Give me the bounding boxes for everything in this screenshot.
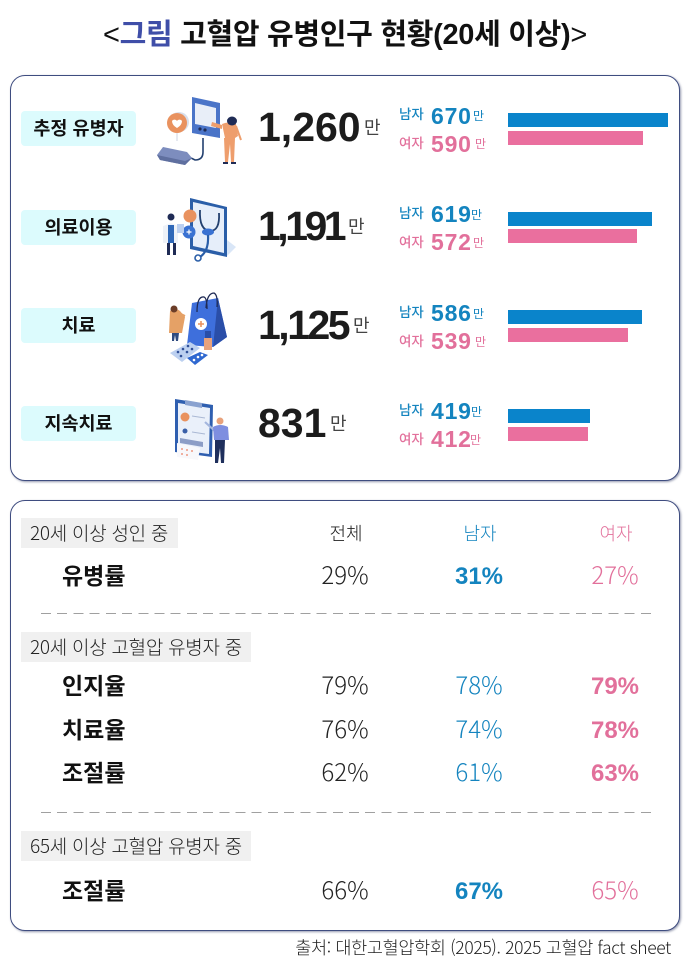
male 619: 남자 [399,206,424,221]
text: 572 [431,229,472,255]
female 590: 여자 [399,136,424,151]
row: control rate 65+: 조절률 [62,878,125,904]
panel: patient counts [10,75,680,481]
total: 1,260: 1,260 [258,104,361,150]
text: 619 [431,201,472,227]
text: 79% [591,673,639,700]
label: continued treatment [21,406,136,441]
unit: 만 [348,217,365,237]
icon: clipboard and person [175,399,229,463]
total: 831: 831 [258,400,326,446]
text: 만 [475,335,486,349]
text: 만 [473,307,484,321]
unit: 만 [364,118,381,138]
unit: 만 [353,316,370,336]
label: treatment: 치료 [61,315,96,336]
text: 만 [471,208,482,222]
column heading: male: 남자 [463,520,497,546]
text: 만 [470,433,481,447]
title: <그림 고혈압 유병인구 현황(20세 이상)> [103,19,587,51]
column heading: female: 여자 [599,520,633,546]
text: 만 [473,109,484,123]
row: prevalence: 유병률 [62,563,125,589]
icon: doctor and stethoscope [163,198,236,262]
text: 63% [591,760,639,787]
female 572: 여자 [399,235,424,250]
male 670: 남자 [399,107,424,122]
text: 만 [471,405,482,419]
bar female 590 [508,131,643,145]
total: 1,191: 1,191 [258,203,343,249]
label: continued treatment: 지속치료 [44,413,113,434]
section heading: patients 20+: 20세 이상 고혈압 유병자 중 [30,633,242,660]
text: 62% [321,753,369,788]
unit: 만 [330,414,347,434]
row: awareness: 인지율 [62,673,125,699]
female 412: 여자 [399,432,424,447]
male 419: 남자 [399,403,424,418]
text: 66% [321,871,369,906]
label: estimated patients: 추정 유병자 [33,118,124,139]
column heading: total: 전체 [329,520,363,546]
text: 27% [591,556,639,591]
text: 만 [473,236,484,250]
text: 539 [431,328,472,354]
icon: medicine bag [169,292,227,365]
bar female 572 [508,229,637,243]
text: 만 [475,137,486,151]
row: treatment rate: 치료율 [62,717,125,743]
text: 29% [321,556,369,591]
text: 79% [321,666,369,701]
text: 586 [431,300,472,326]
text: 76% [321,710,369,745]
text: 65% [591,871,639,906]
text: 74% [455,710,503,745]
bar male 670 [508,113,668,127]
text: 67% [455,878,503,905]
text: 78% [455,666,503,701]
source note: 출처: 대한고혈압학회 (2025). 2025 고혈압 fact sheet [295,935,671,960]
bar male 419 [508,409,590,423]
label: estimated patients [21,111,136,146]
bar female 412 [508,427,588,441]
label: treatment [21,308,136,343]
panel: rates table [10,500,680,931]
text: 590 [431,131,472,157]
bar male 619 [508,212,652,226]
bar female 539 [508,328,628,342]
male 586: 남자 [399,305,424,320]
text: 78% [591,717,639,744]
section heading: patients 65+: 65세 이상 고혈압 유병자 중 [30,832,242,859]
text: 61% [455,753,503,788]
bar male 586 [508,310,642,324]
row: control rate: 조절률 [62,760,125,786]
text: 412 [431,426,472,452]
total: 1,125: 1,125 [258,302,348,348]
section heading: adults: 20세 이상 성인 중 [30,519,168,546]
text: 419 [431,398,472,424]
text: 31% [455,563,503,590]
label: medical use: 의료이용 [44,217,113,238]
icon: blood pressure monitor [157,97,242,165]
female 539: 여자 [399,334,424,349]
label: medical use [21,210,136,245]
text: 670 [431,103,472,129]
